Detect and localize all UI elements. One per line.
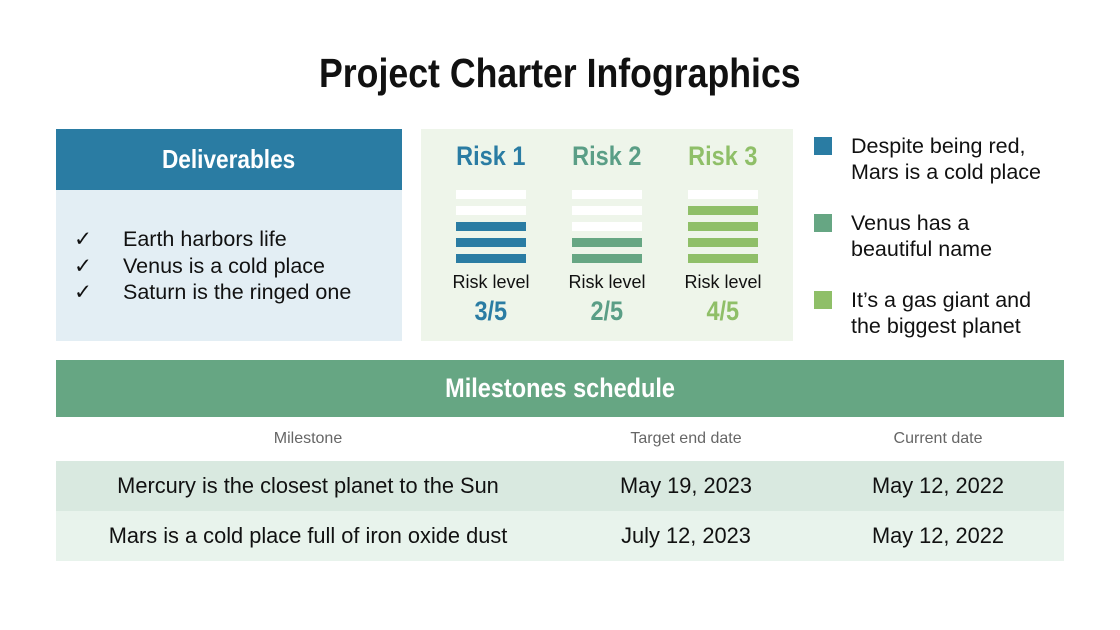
- deliverables list: Venus is a cold place: [123, 254, 325, 278]
- legend item 3: the biggest planet: [851, 314, 1021, 338]
- deliverables list: ✓: [74, 227, 92, 251]
- deliverables heading: Deliverables: [162, 144, 296, 174]
- legend item 1: Mars is a cold place: [851, 160, 1041, 184]
- risk 3: Risk level: [684, 272, 762, 292]
- row 1: May 12, 2022: [872, 473, 1004, 498]
- risk 1: [452, 141, 530, 326]
- row 1: May 19, 2023: [620, 473, 752, 498]
- column headers: Target end date: [630, 430, 742, 447]
- risk 3: Risk 3: [688, 141, 758, 171]
- column headers: Current date: [894, 430, 982, 447]
- risk 1: 3/5: [475, 296, 507, 326]
- panel: deliverables: [56, 129, 402, 341]
- row 2: July 12, 2023: [621, 523, 751, 548]
- deliverables list: ✓: [74, 280, 92, 304]
- row 1: [56, 461, 1064, 511]
- legend item 3: It’s a gas giant and: [851, 288, 1031, 312]
- risk 2: [568, 141, 646, 326]
- risk 3: [684, 141, 762, 326]
- table heading: Milestones schedule: [445, 373, 675, 403]
- row 2: Mars is a cold place full of iron oxide dust: [109, 523, 507, 548]
- risk 2: 2/5: [591, 296, 623, 326]
- risk 1: Risk level: [452, 272, 530, 292]
- deliverables list: [74, 227, 351, 304]
- title: Project Charter Infographics: [319, 50, 801, 96]
- milestones table: [56, 360, 1064, 561]
- legend item 1: [814, 134, 1041, 184]
- risk 2: Risk 2: [572, 141, 642, 171]
- row 2: May 12, 2022: [872, 523, 1004, 548]
- legend item 2: beautiful name: [851, 237, 992, 261]
- deliverables list: ✓: [74, 254, 92, 278]
- column headers: [274, 430, 982, 447]
- risk 1: Risk 1: [456, 141, 526, 171]
- row 1: Mercury is the closest planet to the Sun: [117, 473, 499, 498]
- deliverables list: Earth harbors life: [123, 227, 287, 251]
- panel: risks: [421, 129, 793, 341]
- legend item 3: [814, 288, 1031, 338]
- table heading: [56, 360, 1064, 417]
- deliverables list: Saturn is the ringed one: [123, 280, 351, 304]
- row 2: [56, 511, 1064, 561]
- column headers: Milestone: [274, 430, 342, 447]
- legend item 2: Venus has a: [851, 211, 969, 235]
- legend item 2: [814, 211, 992, 261]
- risk 2: Risk level: [568, 272, 646, 292]
- legend item 1: Despite being red,: [851, 134, 1026, 158]
- risk 3: 4/5: [707, 296, 739, 326]
- legend: [814, 134, 1041, 338]
- deliverables heading: [56, 129, 402, 190]
